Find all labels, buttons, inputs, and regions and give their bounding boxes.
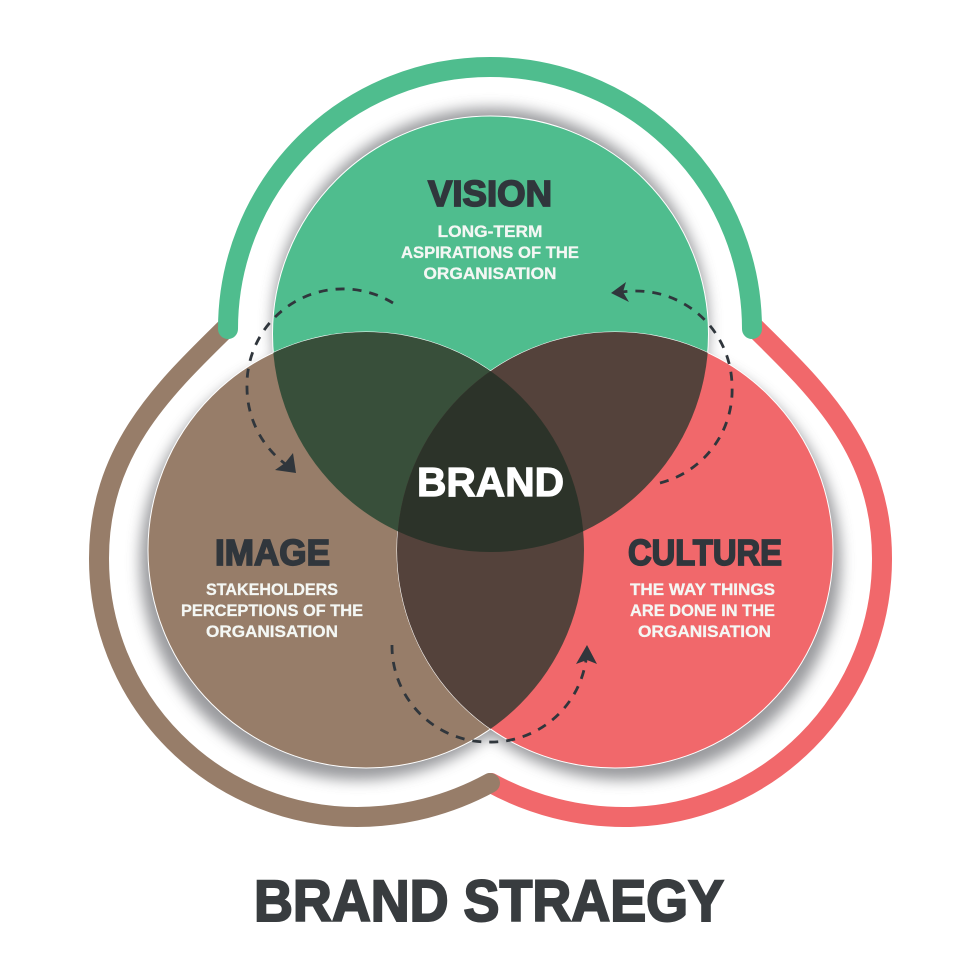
text: culture description: ARE DONE IN THE [630, 601, 775, 620]
heading: image: IMAGE [215, 532, 330, 573]
circle: vision [272, 116, 708, 552]
circle: culture [397, 332, 833, 768]
heading: vision: VISION [428, 173, 552, 214]
ring: vision [228, 67, 752, 329]
ring: image [99, 328, 490, 817]
ring: culture [491, 328, 882, 817]
outer rings [99, 67, 882, 817]
dashed cycle arrows [247, 282, 732, 742]
text: image description: STAKEHOLDERS [206, 580, 338, 599]
label: vision [401, 173, 579, 283]
text: image description: PERCEPTIONS OF THE [181, 601, 363, 620]
text: vision description: LONG-TERM [438, 222, 542, 241]
circle: image [148, 332, 584, 768]
arrow: culture to vision [611, 282, 732, 483]
overlap: image and culture [397, 531, 584, 729]
overlap: vision and culture [398, 332, 708, 532]
venn diagram [148, 116, 833, 768]
overlap: vision and image [273, 332, 490, 532]
text: culture description: ORGANISATION [638, 622, 771, 641]
label: brand: BRAND [417, 459, 564, 505]
text: vision description: ASPIRATIONS OF THE [401, 243, 579, 262]
title: BRAND STRAEGY [254, 869, 724, 934]
text: image description [181, 580, 363, 641]
arrow: image to culture [392, 645, 597, 742]
text: culture description [630, 580, 775, 641]
label: image [181, 532, 363, 641]
label: culture [628, 532, 782, 641]
text: image description: ORGANISATION [206, 622, 338, 641]
text: culture description: THE WAY THINGS [630, 580, 775, 599]
arrow: vision to image [247, 289, 393, 473]
overlap: brand centre [398, 371, 584, 552]
text: vision description: ORGANISATION [424, 264, 556, 283]
circle shadows [140, 108, 841, 780]
heading: culture: CULTURE [628, 532, 782, 573]
text: vision description [401, 222, 579, 283]
